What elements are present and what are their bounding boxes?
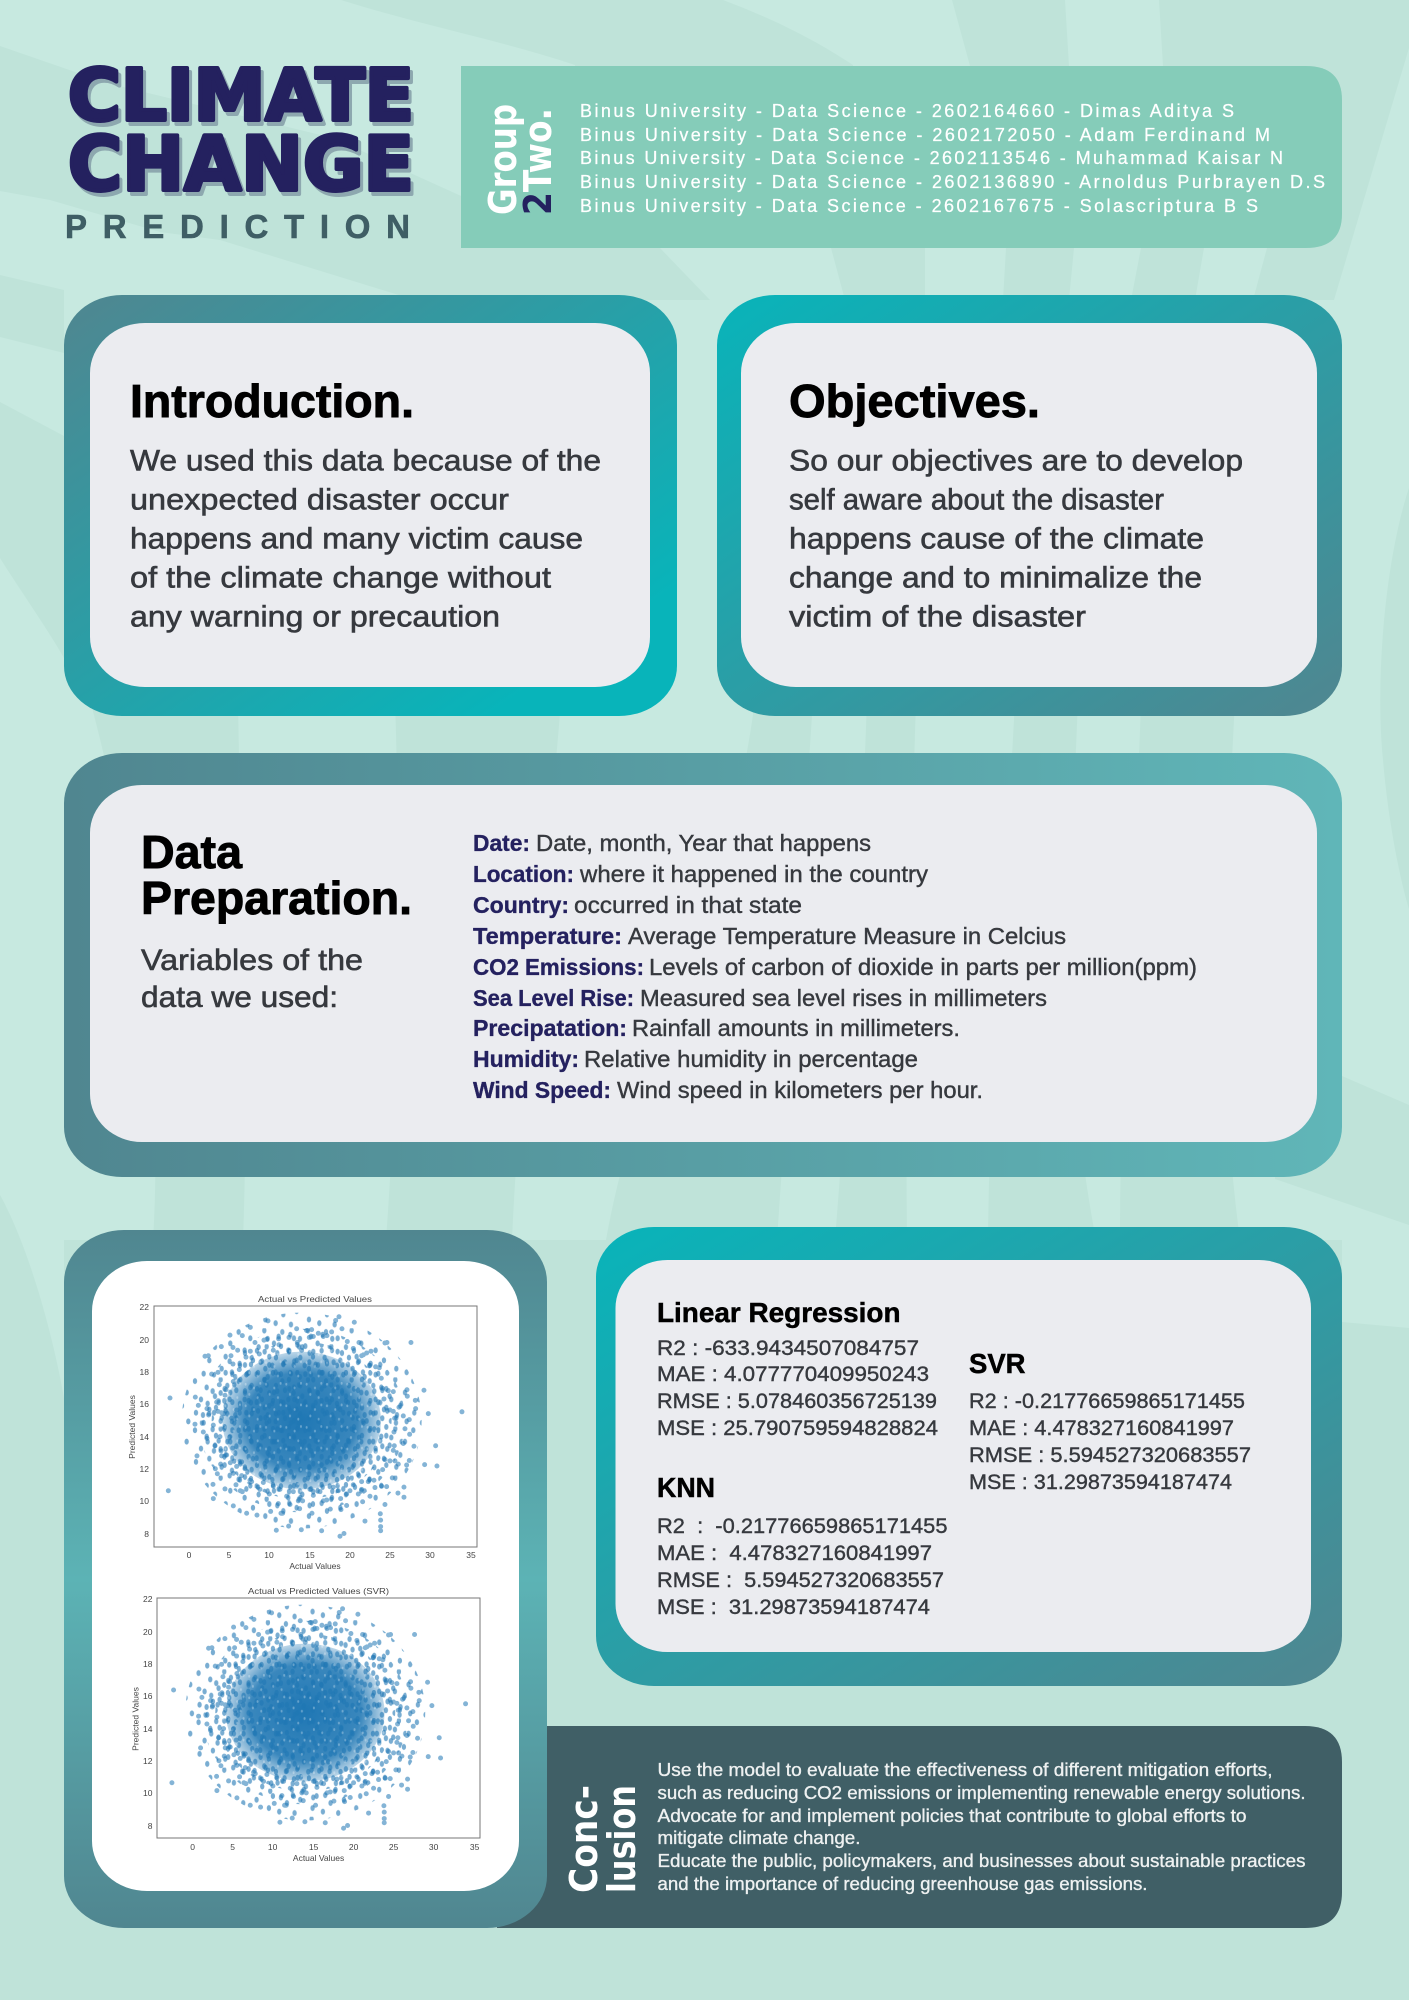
member list: Binus University - Data Science - 2602113546 - Muhammad Kaisar N: [580, 148, 1283, 168]
variable list: Date, month, Year that happens: [536, 830, 871, 856]
chart: actual vs predicted values (SVR): Predicted Values: [131, 1687, 141, 1751]
variable list: where it happened in the country: [579, 861, 929, 887]
chart: actual vs predicted values (SVR): 15: [309, 1842, 319, 1852]
results: SVR: RMSE : 5.594527320683557: [969, 1443, 1251, 1467]
chart: actual vs predicted values: 15: [305, 1550, 315, 1560]
chart: actual vs predicted values: 0: [187, 1550, 192, 1560]
variable list: Levels of carbon of dioxide in parts per million(ppm): [649, 954, 1197, 980]
title line: CHANGE: CHANGE: [71, 124, 417, 212]
chart: actual vs predicted values: 35: [466, 1550, 476, 1560]
text: objectives body: victim of the disaster: [789, 600, 1086, 634]
variable list: Country:: [473, 892, 569, 918]
chart: actual vs predicted values (SVR): 14: [143, 1724, 153, 1734]
chart: actual vs predicted values: 16: [140, 1399, 149, 1409]
chart: actual vs predicted values: 20: [140, 1335, 149, 1345]
chart: actual vs predicted values: Predicted Values: [127, 1395, 137, 1459]
text: conclusion body: and the importance of reducing greenhouse gas emissions.: [658, 1873, 1148, 1894]
chart: actual vs predicted values: 5: [227, 1550, 232, 1560]
title line: PREDICTION: PREDICTION: [65, 208, 410, 245]
chart: actual vs predicted values: 25: [385, 1550, 395, 1560]
results: linear regression: RMSE : 5.078460356725139: [657, 1389, 937, 1413]
member list: Binus University - Data Science - 2602164660 - Dimas Aditya S: [580, 101, 1234, 121]
chart: actual vs predicted values: 10: [140, 1496, 149, 1506]
heading: Data Preparation: Data: [141, 826, 242, 878]
heading: Data Preparation: Preparation.: [141, 872, 412, 924]
variable list: Date:: [473, 830, 530, 856]
chart: actual vs predicted values (SVR): 18: [143, 1659, 153, 1669]
chart: actual vs predicted values (SVR): 16: [143, 1691, 153, 1701]
results: KNN: KNN: [657, 1472, 715, 1503]
variable list: CO2 Emissions:: [473, 954, 644, 980]
text: objectives body: change and to minimalize the: [789, 562, 1202, 594]
panel: conclusion: [497, 1726, 1342, 1928]
results: KNN: MAE : 4.478327160841997: [657, 1541, 932, 1565]
results: SVR: [969, 1348, 1251, 1494]
chart: actual vs predicted values (SVR): 25: [389, 1842, 399, 1852]
text: variables intro: [141, 944, 363, 1014]
text: introduction body: of the climate change without: [130, 562, 552, 594]
text: introduction body: happens and many victim cause: [130, 522, 583, 556]
results: SVR: MAE : 4.478327160841997: [969, 1416, 1234, 1440]
panel: scatter charts: [64, 1230, 547, 1928]
text: conclusion body: mitigate climate change.: [658, 1827, 860, 1848]
chart: actual vs predicted values (SVR): 20: [143, 1627, 153, 1637]
variable list: Location:: [473, 861, 574, 887]
panel: objectives: [717, 295, 1342, 716]
text: variables intro: data we used:: [141, 981, 338, 1014]
results: linear regression: MSE : 25.790759594828824: [657, 1416, 938, 1440]
chart: actual vs predicted values: 10: [264, 1550, 274, 1560]
text: objectives body: happens cause of the climate: [789, 522, 1204, 556]
chart: actual vs predicted values: 8: [144, 1529, 149, 1539]
title line: CHANGE: CHANGE: [68, 120, 414, 208]
panel: group banner: [461, 66, 1342, 248]
variable list: [473, 830, 1197, 1103]
text: conclusion body: such as reducing CO2 emissions or implementing renewable energy solutions.: [658, 1782, 1306, 1803]
results: KNN: RMSE : 5.594527320683557: [657, 1568, 944, 1592]
text: conclusion body: Use the model to evaluate the effectiveness of different mitigation efforts,: [658, 1759, 1272, 1780]
results: KNN: [657, 1472, 948, 1619]
heading: Data Preparation: [141, 826, 412, 924]
variable list: Average Temperature Measure in Celcius: [628, 923, 1066, 949]
title: Climate Change Prediction: [65, 54, 417, 245]
chart: actual vs predicted values (SVR): 20: [349, 1842, 359, 1852]
member list: Binus University - Data Science - 2602136890 - Arnoldus Purbrayen D.S: [580, 172, 1325, 192]
chart: actual vs predicted values: Actual Values: [289, 1561, 341, 1571]
text: introduction body: unexpected disaster occur: [130, 484, 509, 516]
chart: actual vs predicted values: 20: [345, 1550, 355, 1560]
results: KNN: MSE : 31.29873594187474: [657, 1595, 930, 1619]
chart: actual vs predicted values (SVR): 5: [230, 1842, 235, 1852]
chart: actual vs predicted values (SVR): 12: [143, 1756, 153, 1766]
variable list: Temperature:: [473, 923, 622, 949]
variable list: Precipatation:: [473, 1015, 627, 1041]
chart: actual vs predicted values (SVR): 0: [190, 1842, 195, 1852]
chart: actual vs predicted values (SVR): 22: [143, 1594, 153, 1604]
variable list: Sea Level Rise:: [473, 985, 634, 1011]
results: SVR: R2 : -0.21776659865171455: [969, 1389, 1245, 1413]
chart: actual vs predicted values (SVR): [131, 1586, 480, 1863]
panel: introduction: [64, 295, 677, 716]
group label: 2Two.: [516, 108, 560, 215]
chart: actual vs predicted values (SVR): 10: [268, 1842, 278, 1852]
member list: Binus University - Data Science - 2602172050 - Adam Ferdinand M: [580, 125, 1270, 145]
member list: [580, 101, 1325, 216]
text: introduction body: [130, 444, 601, 634]
chart: actual vs predicted values (SVR): 10: [143, 1788, 153, 1798]
chart: actual vs predicted values: Actual vs Predicted Values: [258, 1294, 372, 1304]
title line: CLIMATE: CLIMATE: [68, 54, 414, 137]
panel: data preparation: [64, 753, 1342, 1177]
results: linear regression: MAE : 4.077770409950243: [657, 1362, 929, 1386]
variable list: occurred in that state: [574, 892, 802, 918]
chart: actual vs predicted values (SVR): 8: [148, 1821, 153, 1831]
text: objectives body: So our objectives are to develop: [789, 444, 1243, 478]
variable list: Wind Speed:: [473, 1077, 611, 1103]
text: conclusion body: Advocate for and implement policies that contribute to global efforts to: [658, 1805, 1246, 1826]
results: SVR: SVR: [969, 1348, 1026, 1379]
text: variables intro: Variables of the: [141, 944, 363, 977]
heading: Conclusion (rotated): [562, 1785, 644, 1893]
heading: Introduction: Introduction.: [130, 375, 414, 427]
text: objectives body: self aware about the disaster: [789, 484, 1164, 516]
variable list: Rainfall amounts in millimeters.: [632, 1015, 960, 1041]
results: linear regression: R2 : -633.9434507084757: [657, 1336, 919, 1360]
group label: [481, 104, 560, 215]
chart: actual vs predicted values (SVR): Actual Values: [293, 1853, 344, 1863]
chart: actual vs predicted values: 22: [140, 1302, 149, 1312]
results: KNN: R2 : -0.21776659865171455: [657, 1514, 948, 1538]
results: linear regression: [657, 1297, 938, 1440]
group label: Group: [481, 104, 525, 215]
chart: actual vs predicted values (SVR): 30: [429, 1842, 439, 1852]
chart: actual vs predicted values: [127, 1294, 477, 1571]
chart: actual vs predicted values: 18: [140, 1367, 149, 1377]
chart: actual vs predicted values (SVR): Actual vs Predicted Values (SVR): [248, 1586, 389, 1596]
text: introduction body: We used this data because of the: [130, 444, 601, 478]
chart: actual vs predicted values (SVR): 35: [470, 1842, 480, 1852]
text: conclusion body: [658, 1759, 1306, 1894]
title line: CLIMATE: CLIMATE: [71, 58, 417, 141]
chart: actual vs predicted values: 30: [425, 1550, 435, 1560]
variable list: Wind speed in kilometers per hour.: [617, 1077, 983, 1103]
results: SVR: MSE : 31.29873594187474: [969, 1470, 1232, 1494]
variable list: Humidity:: [473, 1046, 579, 1072]
variable list: Relative humidity in percentage: [584, 1046, 918, 1072]
variable list: Measured sea level rises in millimeters: [640, 985, 1047, 1011]
member list: Binus University - Data Science - 2602167675 - Solascriptura B S: [580, 196, 1258, 216]
text: objectives body: [789, 444, 1243, 634]
results: linear regression: Linear Regression: [657, 1297, 900, 1328]
panel: model results: [596, 1227, 1342, 1686]
text: introduction body: any warning or precaution: [130, 600, 500, 634]
chart: actual vs predicted values: 12: [140, 1464, 149, 1474]
heading: Objectives: Objectives.: [789, 375, 1040, 427]
heading: Conclusion (rotated): Conc-: [562, 1785, 606, 1893]
text: conclusion body: Educate the public, policymakers, and businesses about sustainable practices: [658, 1850, 1306, 1871]
heading: Conclusion (rotated): lusion: [600, 1785, 644, 1893]
chart: actual vs predicted values: 14: [140, 1432, 149, 1442]
